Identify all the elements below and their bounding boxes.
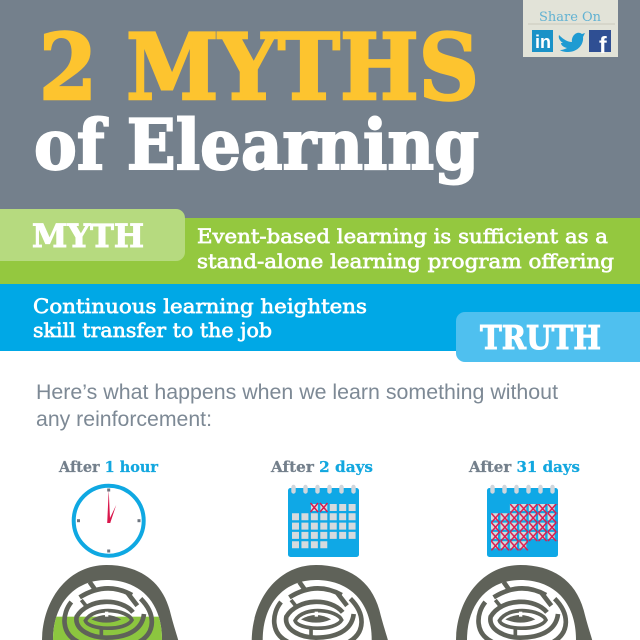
truth tab <box>456 312 640 362</box>
icon: facebook: f <box>599 32 607 58</box>
share panel <box>523 0 618 58</box>
myth band <box>0 209 640 284</box>
title <box>34 15 479 186</box>
myth statement: stand-alone learning program offering <box>197 249 614 273</box>
truth band <box>0 284 640 362</box>
share label: Share On <box>539 10 602 25</box>
icon: calendar 31 days <box>487 487 558 557</box>
truth statement: Continuous learning heightens <box>33 294 367 318</box>
myth label: MYTH <box>32 217 144 255</box>
head maze: 2 days <box>252 565 388 640</box>
icon: linkedin: in <box>535 32 551 52</box>
head maze: 1 hour <box>42 565 179 640</box>
intro text: any reinforcement: <box>36 408 212 431</box>
icon: twitter <box>559 33 585 52</box>
title: of Elearning <box>34 105 479 186</box>
intro text: Here’s what happens when we learn something without <box>36 381 558 404</box>
label: after 1 hour: After 1 hour <box>58 458 159 476</box>
icon: clock <box>74 486 144 556</box>
myth statement: Event-based learning is sufficient as a <box>197 224 608 248</box>
header background <box>0 0 640 218</box>
title: 2 MYTHS <box>39 15 479 121</box>
myth tab <box>0 209 185 261</box>
icon: calendar 2 days <box>288 487 359 557</box>
truth label: TRUTH <box>480 318 601 357</box>
intro text <box>36 381 558 431</box>
label: after 2 days: After 2 days <box>270 458 373 476</box>
truth statement <box>33 294 367 342</box>
truth statement: skill transfer to the job <box>33 318 272 342</box>
myth statement <box>197 224 614 273</box>
head maze: 31 days <box>456 565 593 640</box>
label: after 31 days: After 31 days <box>468 458 580 476</box>
